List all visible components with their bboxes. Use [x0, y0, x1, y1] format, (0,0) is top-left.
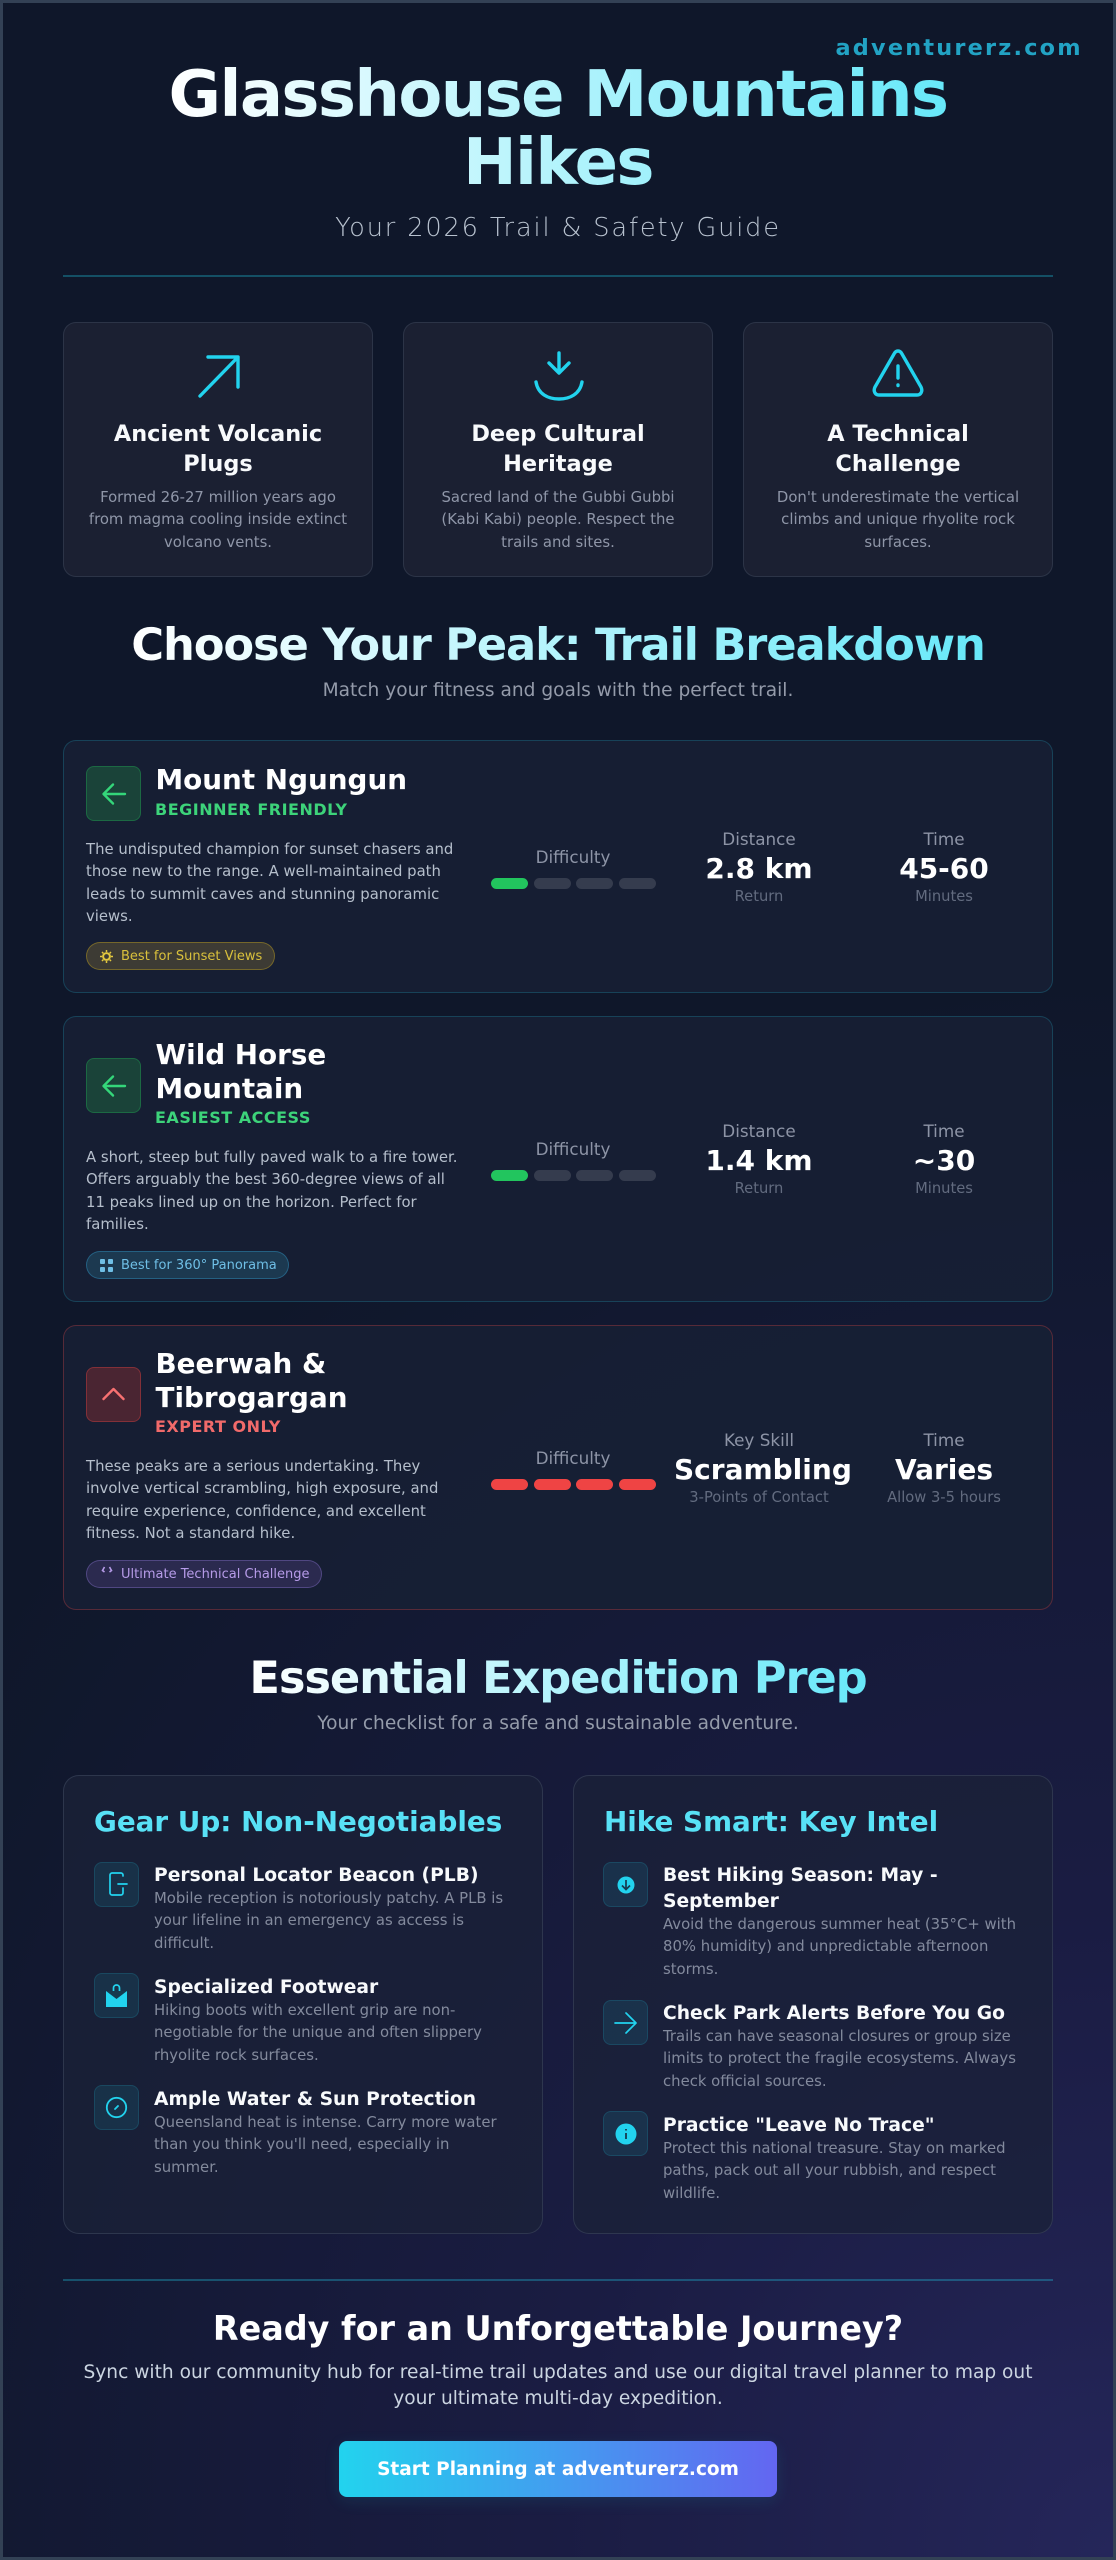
trail description: families.: [86, 1215, 149, 1233]
trail description: The undisputed champion for sunset chasers and: [86, 840, 453, 858]
stat: time: Time: [923, 829, 965, 849]
footer heading: Ready for an Unforgettable Journey?: [213, 2309, 903, 2348]
item: plb: difficult.: [154, 1934, 214, 1952]
item: footwear: Hiking boots with excellent grip are non-: [154, 2001, 455, 2019]
distance note: Return: [735, 888, 783, 905]
title: Glasshouse Mountains: [169, 58, 947, 132]
icon: compass: [94, 2085, 139, 2130]
trail description: Offers arguably the best 360-degree views of all: [86, 1170, 445, 1188]
heading: [114, 421, 322, 477]
trail description: involve vertical scrambling, high exposure, and: [86, 1479, 438, 1497]
trail description: [86, 840, 453, 925]
trail status: EXPERT ONLY: [155, 1417, 281, 1436]
icon: warning triangle: [872, 349, 924, 397]
item: leave no trace: Protect this national treasure. Stay on marked: [663, 2139, 1006, 2157]
stat: time: Time: [923, 1121, 965, 1141]
heading: Heritage: [503, 451, 613, 477]
difficulty bars: [491, 1479, 656, 1490]
icon: info: [603, 2111, 648, 2156]
description: surfaces.: [864, 533, 932, 551]
item: plb: your lifeline in an emergency as access is: [154, 1911, 464, 1929]
heading: [471, 421, 645, 477]
tag: panorama: [86, 1251, 289, 1279]
item: water: Ample Water & Sun Protection: [154, 2088, 476, 2110]
item: leave no trace: [663, 2114, 1006, 2202]
trail description: A short, steep but fully paved walk to a fire tower.: [86, 1148, 457, 1166]
tag: technical: Ultimate Technical Challenge: [121, 1567, 310, 1582]
icon: green arrow: [86, 1058, 141, 1113]
trail description: [86, 1457, 438, 1542]
section heading: trails: Choose Your Peak: Trail Breakdown: [131, 618, 985, 671]
brand url: adventurerz.com: [836, 35, 1083, 61]
button: Start Planning at adventurerz.com: [377, 2459, 739, 2480]
panel: wild horse mountain: [63, 1016, 1053, 1302]
item: water: Queensland heat is intense. Carry more water: [154, 2113, 497, 2131]
stat: difficulty: Difficulty: [536, 1139, 610, 1159]
item: footwear: Specialized Footwear: [154, 1976, 378, 1998]
tag: technical: [86, 1560, 322, 1588]
heading: [827, 421, 969, 477]
icon: green arrow: [86, 766, 141, 821]
item: footwear: negotiable for the unique and often slippery: [154, 2023, 482, 2041]
description: [441, 488, 675, 551]
icon: season: [603, 1862, 648, 1907]
panel heading: hike smart: Hike Smart: Key Intel: [604, 1804, 938, 1838]
tag: sunset: Best for Sunset Views: [121, 949, 262, 964]
stat: distance: Distance: [722, 1121, 796, 1141]
item: alerts: check official sources.: [663, 2072, 827, 2090]
difficulty bars: [491, 878, 656, 889]
panel: mount ngungun: [63, 740, 1053, 993]
title: Hikes: [463, 126, 653, 200]
description: [89, 488, 347, 551]
footer text: [83, 2362, 1033, 2409]
item: leave no trace: paths, pack out all your rubbish, and respect: [663, 2161, 996, 2179]
trail name: Mount Ngungun: [156, 763, 407, 796]
time value: ~30: [913, 1144, 975, 1177]
description: [777, 488, 1019, 551]
item: alerts: [662, 2002, 1016, 2090]
item: water: than you think you'll need, especially in: [154, 2135, 449, 2153]
icon: footwear bag: [94, 1973, 139, 2018]
trail description: those new to the range. A well-maintained path: [86, 862, 441, 880]
panel: deep cultural heritage: [403, 322, 713, 577]
stat: difficulty: Difficulty: [536, 847, 610, 867]
trail description: These peaks are a serious undertaking. They: [86, 1457, 420, 1475]
item: footwear: rhyolite rock surfaces.: [154, 2046, 319, 2064]
distance value: 1.4 km: [705, 1144, 813, 1177]
tag: panorama: Best for 360° Panorama: [121, 1258, 277, 1273]
description: Sacred land of the Gubbi Gubbi: [441, 488, 675, 506]
button: [339, 2441, 777, 2497]
icon: arrow up right: [198, 355, 240, 398]
trail name: [156, 1038, 326, 1104]
time value: 45-60: [899, 852, 989, 885]
item: alerts: Trails can have seasonal closures or group size: [663, 2027, 1011, 2045]
trail description: views.: [86, 907, 133, 925]
item: leave no trace: wildlife.: [663, 2184, 720, 2202]
section heading: prep: Essential Expedition Prep: [249, 1651, 867, 1704]
subtitle: Your 2026 Trail & Safety Guide: [335, 213, 781, 243]
panel: gear up: [63, 1775, 543, 2234]
trail name: [156, 1347, 348, 1414]
trail description: leads to summit caves and stunning panoramic: [86, 885, 439, 903]
item: season: [663, 1864, 1016, 1978]
title: [169, 58, 947, 200]
item: plb: Mobile reception is notoriously patchy. A PLB is: [154, 1889, 503, 1907]
trail description: fitness. Not a standard hike.: [86, 1524, 295, 1542]
stat: key skill: Key Skill: [724, 1430, 794, 1450]
icon: red chevron: [86, 1367, 141, 1422]
key skill value: Scrambling: [674, 1453, 852, 1486]
panel heading: gear up: Gear Up: Non-Negotiables: [94, 1804, 502, 1838]
heading: Ancient Volcanic: [114, 421, 322, 447]
icon: download arc: [534, 351, 584, 401]
footer text: your ultimate multi-day expedition.: [393, 2388, 723, 2409]
item: season: September: [663, 1890, 779, 1912]
item: season: Avoid the dangerous summer heat (35°C+ with: [663, 1915, 1016, 1933]
description: Formed 26-27 million years ago: [100, 488, 336, 506]
section subheading: trails: Match your fitness and goals with the perfect trail.: [323, 680, 793, 701]
footer text: Sync with our community hub for real-time trail updates and use our digital travel planner to map out: [83, 2362, 1033, 2383]
heading: Plugs: [183, 451, 253, 477]
item: alerts: limits to protect the fragile ecosystems. Always: [663, 2049, 1016, 2067]
key skill note: 3-Points of Contact: [689, 1489, 829, 1506]
panel: technical challenge: [743, 322, 1053, 577]
stat: time: Time: [923, 1430, 965, 1450]
icon: alerts: [603, 2000, 648, 2045]
heading: A Technical: [827, 421, 969, 447]
section subheading: prep: Your checklist for a safe and sustainable adventure.: [317, 1713, 799, 1734]
trail name: Beerwah &: [156, 1347, 326, 1380]
item: season: Best Hiking Season: May -: [663, 1864, 938, 1886]
time note: Allow 3-5 hours: [887, 1489, 1001, 1506]
icon: locator beacon: [94, 1862, 139, 1907]
panel: hike smart: [573, 1775, 1053, 2234]
trail description: [86, 1148, 457, 1233]
heading: Challenge: [835, 451, 961, 477]
panel: beerwah and tibrogargan: [63, 1325, 1053, 1610]
item: season: 80% humidity) and unpredictable afternoon: [663, 1937, 988, 1955]
stat: difficulty: Difficulty: [536, 1448, 610, 1468]
trail status: EASIEST ACCESS: [155, 1108, 311, 1127]
item: leave no trace: Practice "Leave No Trace": [663, 2114, 934, 2136]
trail name: Mountain: [156, 1072, 303, 1104]
item: plb: Personal Locator Beacon (PLB): [154, 1864, 478, 1886]
item: water: summer.: [154, 2158, 219, 2176]
description: from magma cooling inside extinct: [89, 510, 347, 528]
description: climbs and unique rhyolite rock: [781, 510, 1015, 528]
item: plb: [154, 1864, 503, 1952]
trail status: BEGINNER FRIENDLY: [155, 800, 347, 819]
heading: Deep Cultural: [471, 421, 645, 447]
item: footwear: [154, 1976, 482, 2064]
item: water: [154, 2088, 497, 2176]
trail description: 11 peaks lined up on the horizon. Perfect for: [86, 1193, 417, 1211]
description: volcano vents.: [164, 533, 272, 551]
tag: sunset: [86, 942, 275, 970]
item: alerts: Check Park Alerts Before You Go: [663, 2002, 1005, 2024]
panel: ancient volcanic plugs: [63, 322, 373, 577]
distance note: Return: [735, 1180, 783, 1197]
description: trails and sites.: [501, 533, 615, 551]
difficulty bars: [491, 1170, 656, 1181]
description: (Kabi Kabi) people. Respect the: [441, 510, 675, 528]
trail description: require experience, confidence, and excellent: [86, 1502, 426, 1520]
time note: Minutes: [915, 1180, 973, 1197]
trail name: Tibrogargan: [156, 1380, 348, 1414]
distance value: 2.8 km: [705, 852, 813, 885]
description: Don't underestimate the vertical: [777, 488, 1019, 506]
trail name: Wild Horse: [156, 1038, 326, 1071]
time note: Minutes: [915, 888, 973, 905]
item: season: storms.: [663, 1960, 718, 1978]
time value: Varies: [895, 1453, 993, 1486]
stat: distance: Distance: [722, 829, 796, 849]
